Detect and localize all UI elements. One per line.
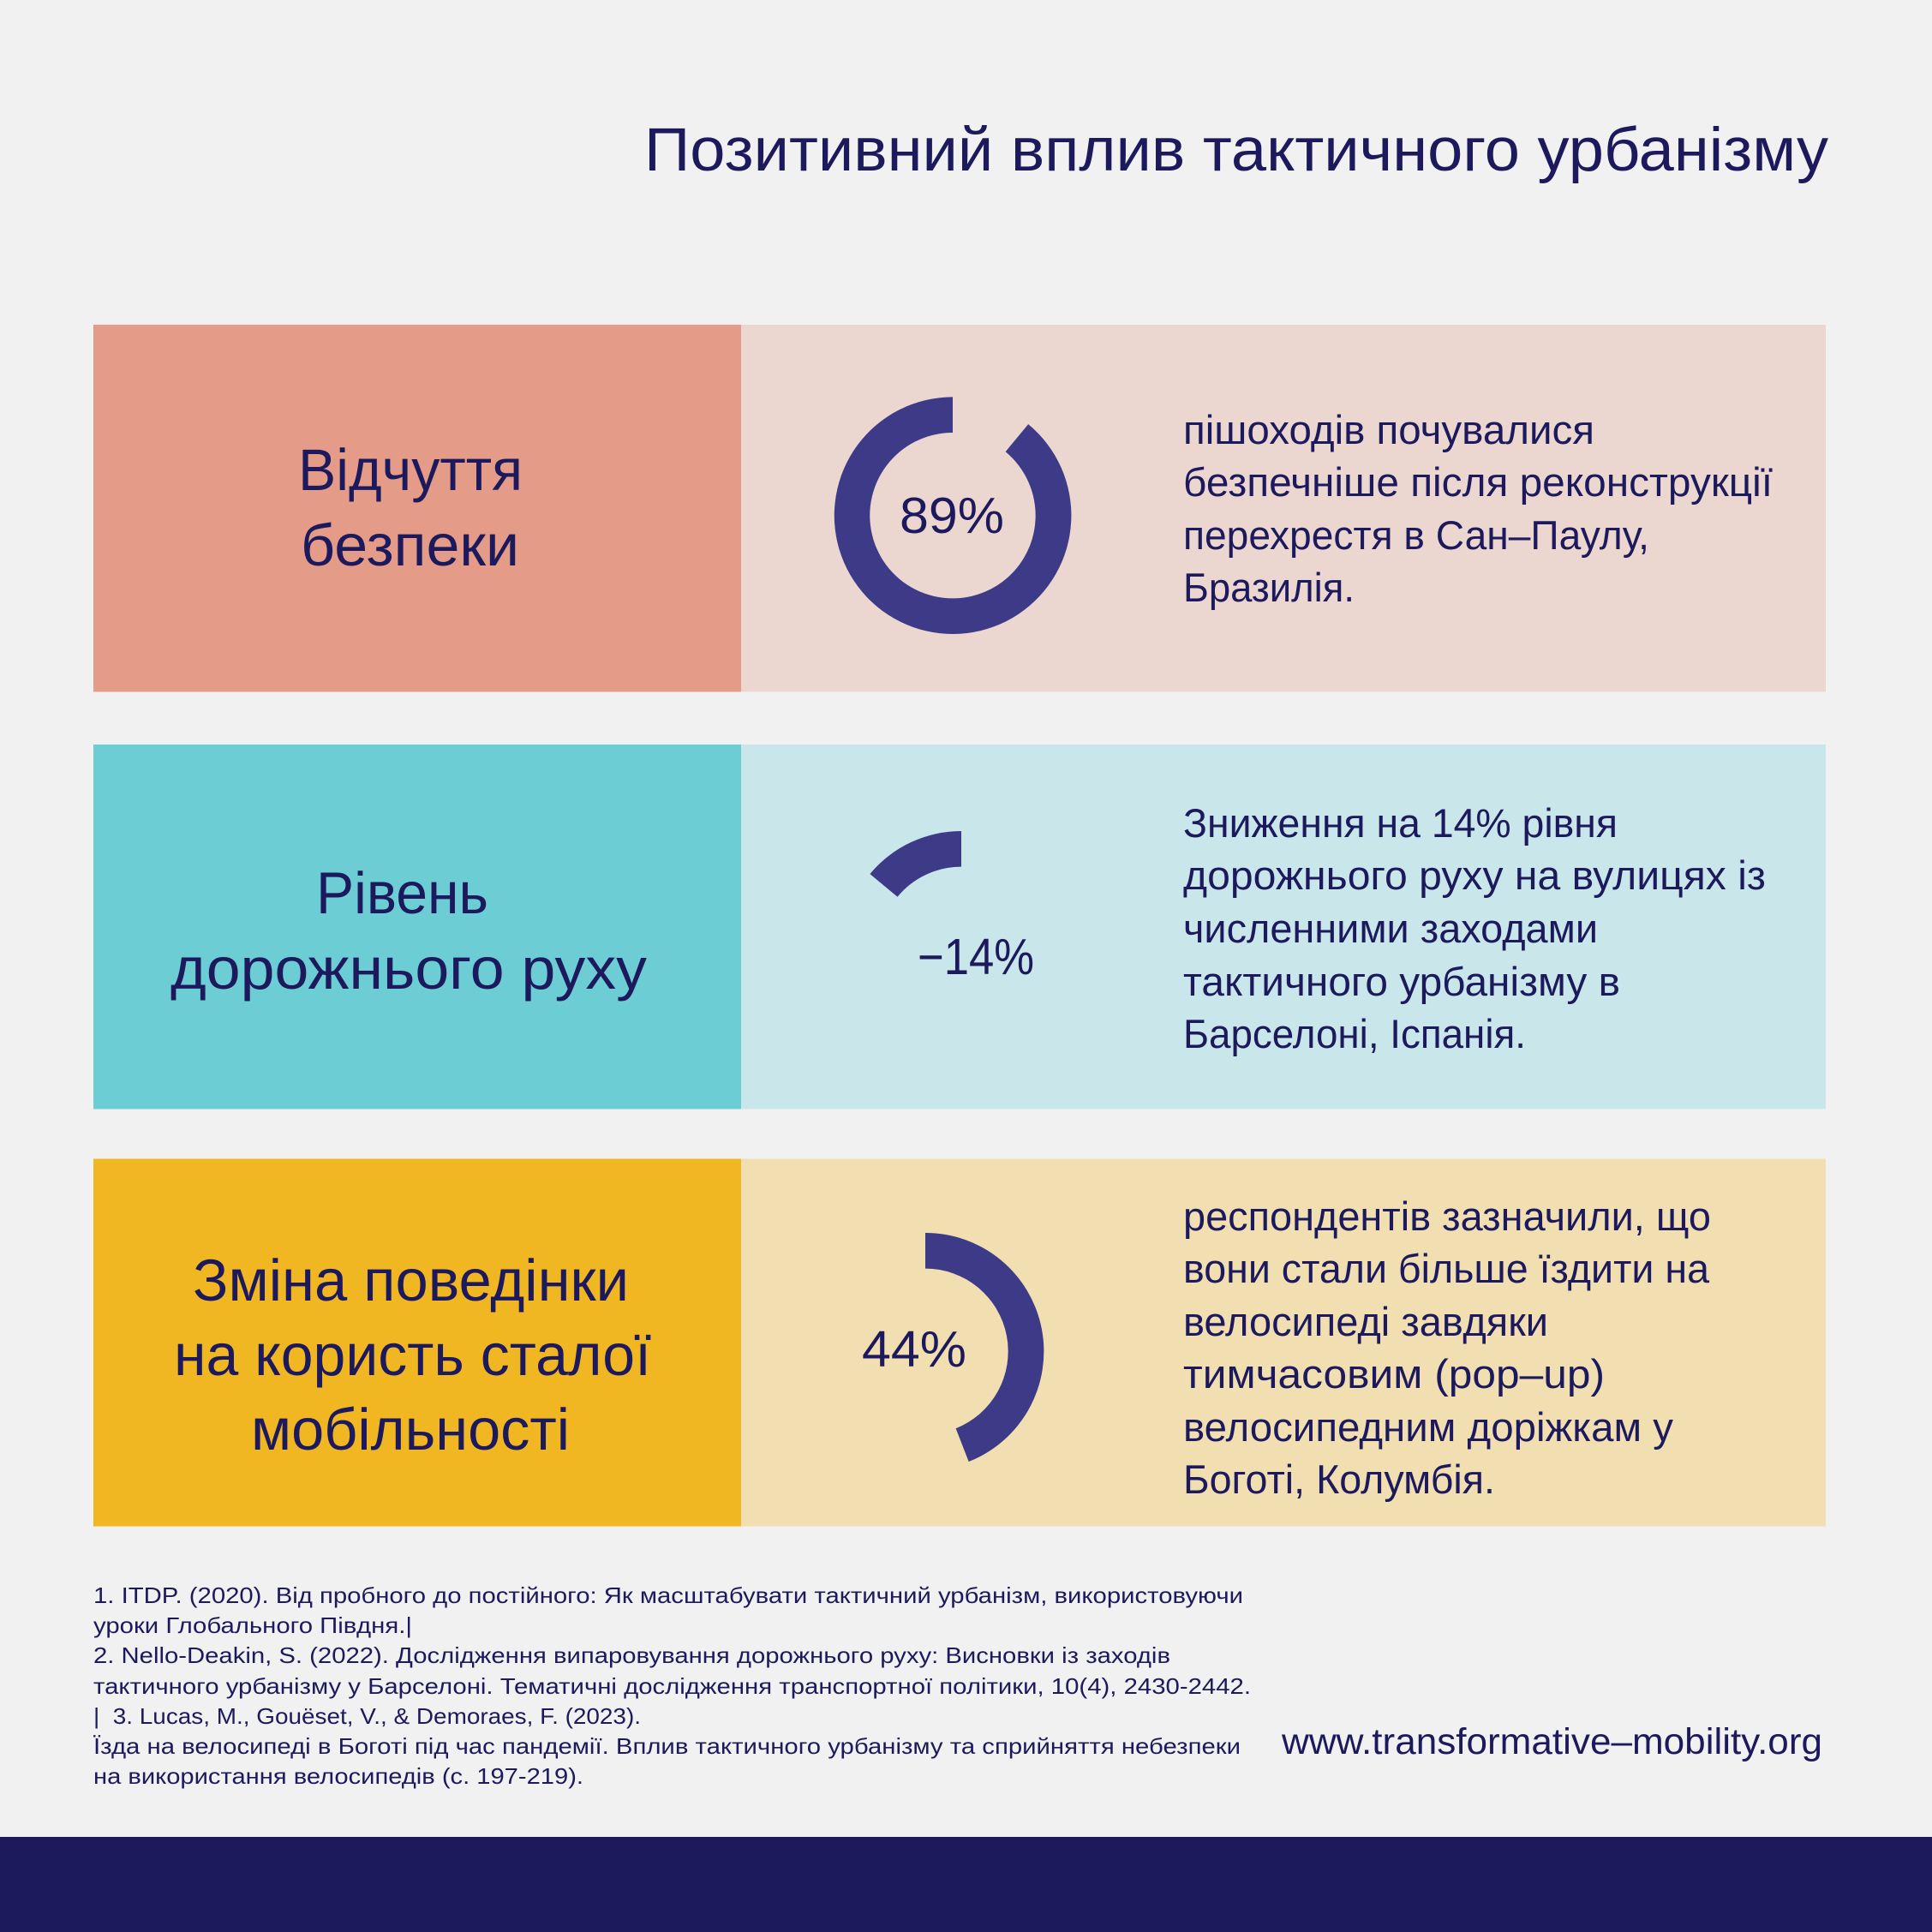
panel background: traffic detail xyxy=(741,745,1826,1109)
heading: behaviour change: мобільності xyxy=(251,1397,570,1462)
text block: traffic description: Зниження на 14% рівня xyxy=(1183,800,1618,846)
heading: traffic level: Рівень xyxy=(316,860,488,926)
text block: behaviour description: велосипедним доріжкам у xyxy=(1183,1404,1673,1450)
footnotes: references: 2. Nello-Deakin, S. (2022). Дослідження випаровування дорожнього руху: Висновки із заходів xyxy=(93,1642,1170,1668)
heading: sense of safety xyxy=(298,437,523,578)
panel: sense of safety xyxy=(93,325,1826,692)
donut chart: -14% xyxy=(870,831,961,897)
heading: sense of safety: безпеки xyxy=(301,512,519,578)
text block: safety description: пішоходів почувалися xyxy=(1183,407,1594,452)
text block: behaviour description: тимчасовим (pop–up) xyxy=(1183,1351,1605,1397)
value: 89%: 89% xyxy=(900,487,1004,544)
title: Позитивний вплив тактичного урбанізму xyxy=(644,117,1829,184)
panel background: behaviour detail xyxy=(741,1158,1826,1527)
footnotes: references: 1. ITDP. (2020). Від пробного до постійного: Як масштабувати тактичний урбанізм, використовуючи xyxy=(93,1582,1243,1608)
donut chart: 89% xyxy=(834,397,1071,634)
footnotes: references: на використання велосипедів (с. 197-219). xyxy=(93,1763,583,1789)
text block: traffic description: Барселоні, Іспанія. xyxy=(1183,1011,1526,1056)
text block: traffic description: дорожнього руху на вулицях із xyxy=(1183,852,1766,898)
text block: traffic description: тактичного урбанізму в xyxy=(1183,959,1620,1004)
text block: traffic description: численними заходами xyxy=(1183,906,1598,951)
footnotes: references: Їзда на велосипеді в Боготі під час пандемії. Вплив тактичного урбанізму та сприйняття небезпеки xyxy=(93,1733,1241,1759)
heading: behaviour change: Зміна поведінки xyxy=(193,1247,629,1313)
panel: behaviour change xyxy=(93,1158,1826,1527)
value: 44%: 44% xyxy=(862,1321,966,1378)
text block: behaviour description: респондентів зазначили, що xyxy=(1183,1193,1711,1239)
panel background: behaviour heading xyxy=(93,1158,741,1527)
heading: sense of safety: Відчуття xyxy=(298,437,523,503)
text block: safety description: безпечніше після реконструкції xyxy=(1183,459,1773,505)
text block: behaviour description xyxy=(1183,1193,1711,1502)
heading: behaviour change: на користь сталої xyxy=(174,1322,651,1388)
text block: safety description: Бразилія. xyxy=(1183,565,1355,610)
footnotes: references: | 3. Lucas, M., Gouëset, V., & Demoraes, F. (2023). xyxy=(93,1703,641,1729)
text block: safety description: перехрестя в Сан–Паулу, xyxy=(1183,512,1649,558)
donut chart: 44% xyxy=(925,1233,1044,1462)
panel: traffic level xyxy=(93,745,1826,1109)
text block: safety description xyxy=(1183,407,1773,610)
heading: behaviour change xyxy=(174,1247,651,1462)
panel background: safety detail xyxy=(741,325,1826,692)
value: -14%: −14% xyxy=(918,929,1034,985)
panel background: safety heading xyxy=(93,325,741,692)
footnotes: references: уроки Глобального Півдня.| xyxy=(93,1612,412,1638)
text block: behaviour description: вони стали більше їздити на xyxy=(1183,1246,1710,1291)
heading: traffic level xyxy=(170,860,648,1002)
text block: behaviour description: велосипеді завдяки xyxy=(1183,1299,1548,1344)
text block: traffic description xyxy=(1183,800,1766,1056)
panel background: traffic heading xyxy=(93,745,741,1109)
footnotes: references xyxy=(93,1582,1251,1789)
heading: traffic level: дорожнього руху xyxy=(170,936,648,1002)
text block: behaviour description: Боготі, Колумбія. xyxy=(1183,1456,1495,1502)
footnotes: references: тактичного урбанізму у Барселоні. Тематичні дослідження транспортної політики, 10(4), 2430-2442. xyxy=(93,1673,1251,1699)
footer bar xyxy=(0,1837,1932,1932)
website url: www.transformative–mobility.org xyxy=(1281,1721,1822,1762)
